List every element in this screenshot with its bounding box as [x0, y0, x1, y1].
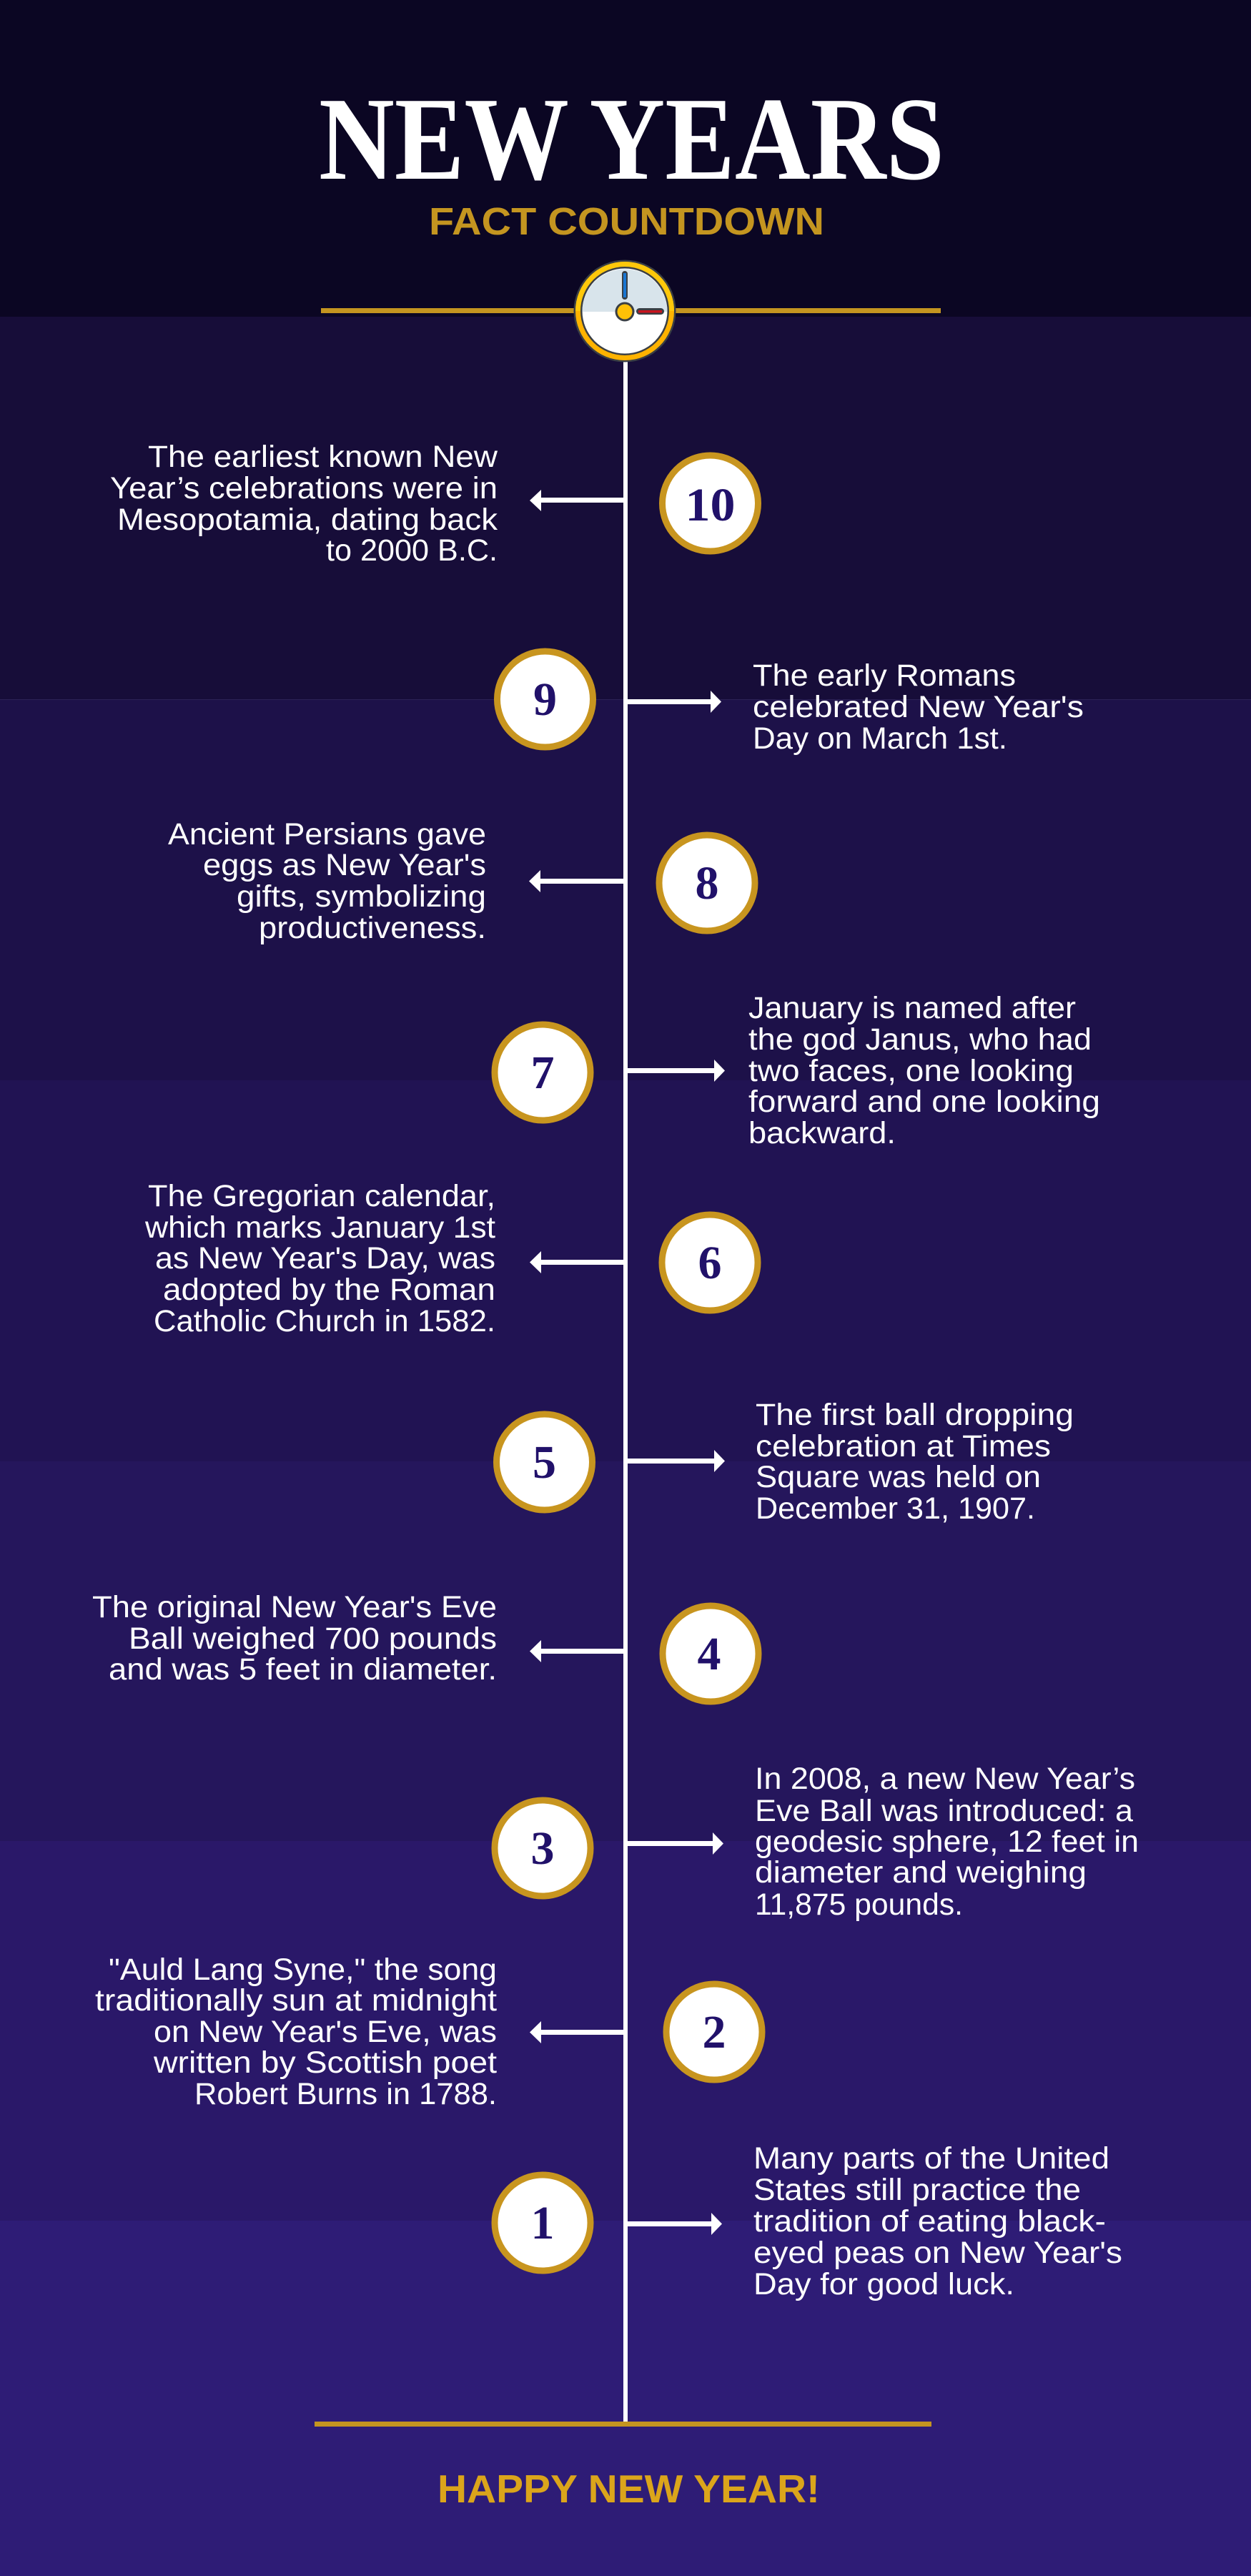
text: fact 2: traditionally sun at midnight	[95, 1983, 497, 2018]
timeline vertical line	[623, 357, 628, 2426]
badge: 6	[662, 1215, 758, 1311]
text: fact 6: as New Year's Day, was	[155, 1241, 495, 1275]
header gold rule	[321, 308, 941, 313]
badge: 2	[666, 1984, 762, 2080]
badge: 4	[663, 1606, 758, 1702]
text: fact 6	[144, 1179, 495, 1338]
text: fact 1: States still practice the	[753, 2173, 1081, 2207]
text: fact 10: Year’s celebrations were in	[110, 471, 498, 505]
title: NEW YEARS	[319, 73, 944, 204]
text: fact 7: two faces, one looking	[748, 1054, 1074, 1088]
fact 1	[495, 2141, 1122, 2301]
badge: 1	[495, 2175, 590, 2271]
badge: 1: 1	[530, 2197, 555, 2249]
text: fact 7: January is named after	[748, 991, 1076, 1025]
text: fact 4: and was 5 feet in diameter.	[109, 1652, 497, 1687]
arrow: fact 3	[628, 1832, 723, 1855]
fact 5	[496, 1398, 1074, 1526]
text: fact 5: celebration at Times	[756, 1429, 1051, 1464]
text: fact 8: productiveness.	[259, 911, 486, 945]
text: fact 10	[110, 440, 498, 568]
text: fact 9: celebrated New Year's	[753, 690, 1084, 724]
subtitle: FACT COUNTDOWN	[429, 200, 824, 243]
text: fact 3	[755, 1762, 1139, 1922]
footer gold rule	[315, 2422, 931, 2427]
badge: 6: 6	[698, 1237, 722, 1289]
badge: 3: 3	[530, 1822, 555, 1875]
badge: 10: 10	[685, 479, 735, 531]
badge: 8: 8	[695, 857, 719, 909]
text: fact 1: eyed peas on New Year's	[753, 2236, 1122, 2270]
text: fact 9: The early Romans	[753, 658, 1016, 693]
badge: 9	[498, 651, 593, 747]
arrow: fact 2	[530, 2021, 623, 2043]
text: fact 4	[92, 1590, 497, 1687]
fact 10	[110, 440, 758, 568]
badge: 8	[659, 835, 755, 931]
text: fact 5	[756, 1398, 1074, 1526]
icon: clock	[573, 260, 676, 362]
badge: 5	[496, 1414, 592, 1510]
badge: 7: 7	[530, 1047, 555, 1099]
fact 8	[168, 817, 755, 945]
text: fact 1	[753, 2141, 1122, 2301]
text: fact 4: Ball weighed 700 pounds	[129, 1622, 497, 1656]
badge: 7	[495, 1025, 590, 1120]
text: fact 6: adopted by the Roman	[163, 1273, 495, 1307]
arrow: fact 5	[628, 1450, 725, 1472]
text: fact 2: written by Scottish poet	[153, 2045, 497, 2080]
text: fact 6: The Gregorian calendar,	[148, 1179, 495, 1213]
footer message: HAPPY NEW YEAR!	[437, 2467, 820, 2511]
text: fact 3: In 2008, a new New Year’s	[755, 1762, 1135, 1796]
arrow: fact 1	[628, 2213, 722, 2235]
text: fact 8: gifts, symbolizing	[237, 879, 486, 914]
fact 7	[495, 991, 1100, 1150]
text: fact 2	[95, 1953, 497, 2111]
text: fact 7: the god Janus, who had	[748, 1022, 1092, 1057]
fact 9	[498, 651, 1084, 756]
badge: 10	[662, 455, 758, 551]
arrow: fact 6	[530, 1251, 623, 1273]
text: fact 8: eggs as New Year's	[203, 848, 486, 882]
badge: 3	[495, 1800, 590, 1896]
text: fact 1: tradition of eating black-	[753, 2204, 1106, 2239]
fact 3	[495, 1762, 1139, 1922]
arrow: fact 9	[628, 691, 721, 713]
fact 2	[95, 1953, 762, 2111]
text: fact 6: which marks January 1st	[144, 1210, 495, 1245]
text: fact 3: Eve Ball was introduced: a	[755, 1794, 1133, 1828]
text: fact 10: to 2000 B.C.	[326, 533, 498, 568]
fact 4	[92, 1590, 758, 1702]
text: fact 2: on New Year's Eve, was	[154, 2015, 497, 2049]
arrow: fact 7	[628, 1060, 725, 1082]
arrow: fact 4	[530, 1640, 623, 1662]
text: fact 7: forward and one looking	[748, 1085, 1100, 1119]
badge: 4: 4	[698, 1628, 721, 1680]
text: fact 5: Square was held on	[756, 1460, 1041, 1494]
text: fact 3: diameter and weighing	[755, 1855, 1087, 1890]
text: fact 1: Many parts of the United	[753, 2141, 1109, 2176]
text: fact 7: backward.	[748, 1116, 896, 1150]
text: fact 10: Mesopotamia, dating back	[117, 503, 498, 537]
text: fact 3: geodesic sphere, 12 feet in	[755, 1825, 1139, 1859]
arrow: fact 8	[529, 870, 623, 892]
text: fact 9	[753, 658, 1084, 756]
text: fact 7	[748, 991, 1100, 1150]
text: fact 4: The original New Year's Eve	[92, 1590, 497, 1624]
text: fact 8	[168, 817, 486, 945]
text: fact 2: "Auld Lang Syne," the song	[109, 1953, 497, 1987]
text: fact 5: The first ball dropping	[756, 1398, 1074, 1432]
text: fact 2: Robert Burns in 1788.	[194, 2077, 497, 2111]
text: fact 10: The earliest known New	[148, 440, 498, 474]
text: fact 6: Catholic Church in 1582.	[154, 1304, 495, 1338]
badge: 2: 2	[702, 2006, 726, 2058]
text: fact 8: Ancient Persians gave	[168, 817, 486, 852]
arrow: fact 10	[530, 490, 623, 511]
badge: 5: 5	[533, 1436, 556, 1489]
text: fact 3: 11,875 pounds.	[755, 1887, 963, 1922]
fact 6	[144, 1179, 758, 1338]
text: fact 9: Day on March 1st.	[753, 721, 1007, 756]
badge: 9: 9	[533, 673, 557, 726]
text: fact 1: Day for good luck.	[753, 2267, 1014, 2301]
text: fact 5: December 31, 1907.	[756, 1491, 1035, 1526]
